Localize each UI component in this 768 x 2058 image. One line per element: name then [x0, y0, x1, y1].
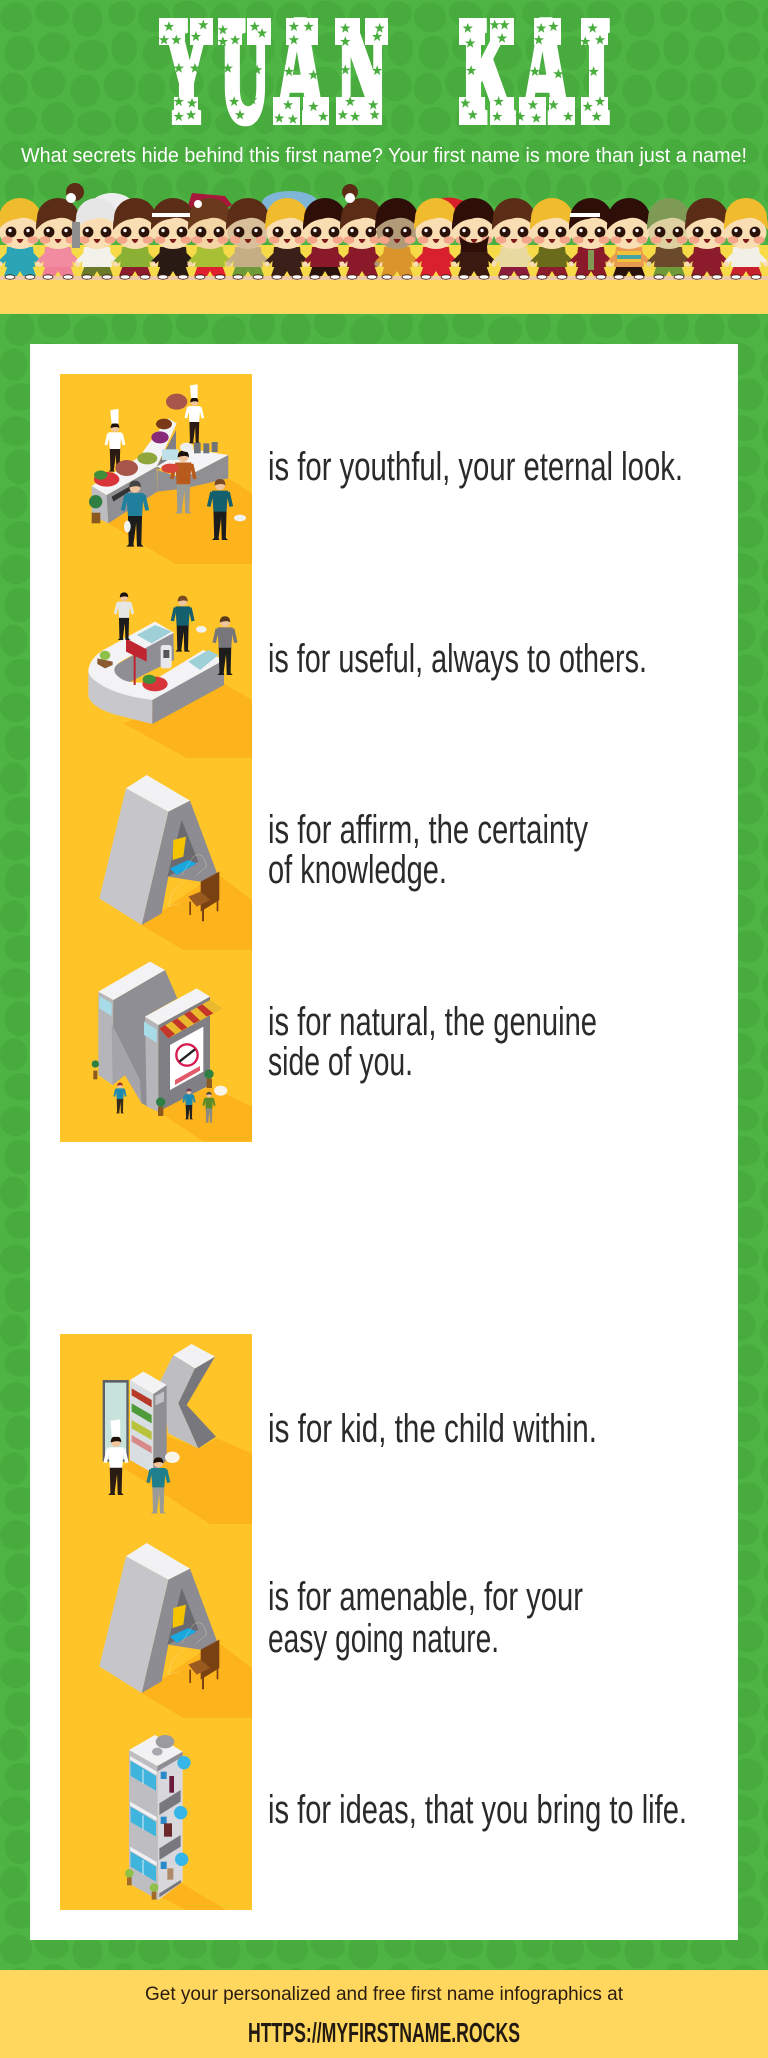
footer band: [0, 1970, 768, 2058]
text: N: [268, 1000, 597, 1084]
image tile: letter U buffet scene: [60, 566, 252, 758]
text: A: is for affirm, the certainty: [268, 808, 588, 852]
footer text: Get your personalized and free first name infographics at: [145, 1984, 624, 2005]
text: A: [268, 808, 588, 892]
image tile: letter I office tower: [60, 1718, 252, 1910]
image tile: letter N with no smoking poster: [60, 950, 252, 1142]
text: K: is for kid, the child within.: [268, 1407, 597, 1451]
text: A second: is for amenable, for your: [268, 1575, 583, 1619]
image tile: letter A with desk and chair: [60, 758, 252, 950]
image tile: letter A with desk and chair, repeated: [60, 1526, 252, 1718]
text: A second: easy going nature.: [268, 1617, 499, 1661]
text: A second: [268, 1575, 583, 1661]
subtitle: What secrets hide behind this first name? Your first name is more than just a name!: [21, 145, 747, 167]
image tile: letter K with fridge: [60, 1334, 252, 1526]
footer url: HTTPS://MYFIRSTNAME.ROCKS: [248, 2017, 520, 2048]
text: A: of knowledge.: [268, 848, 447, 892]
text: N: is for natural, the genuine: [268, 1000, 597, 1044]
text: N: side of you.: [268, 1040, 413, 1084]
image tile: letter Y buffet scene: [60, 374, 252, 566]
main white panel: [30, 344, 738, 1940]
banner: row of cartoon children in costumes: [0, 183, 768, 314]
